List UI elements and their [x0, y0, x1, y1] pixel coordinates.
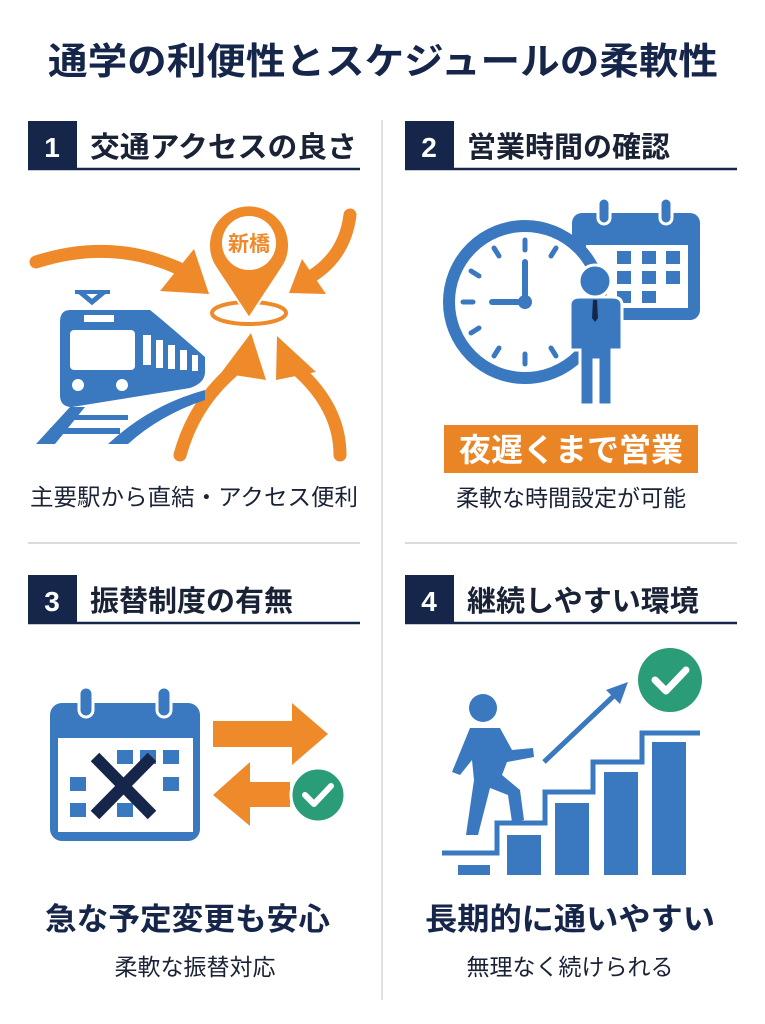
heading 4: 長期的に通いやすい	[425, 902, 715, 937]
caption 1: 主要駅から直結・アクセス便利	[30, 484, 358, 510]
icon: climbing person	[452, 694, 534, 835]
badge: late hours	[444, 425, 698, 473]
panel 3: transfer	[28, 575, 360, 980]
icon: map pin 新橋	[209, 205, 289, 324]
caption 3: 柔軟な振替対応	[114, 954, 276, 980]
header 3	[28, 575, 360, 623]
icon: businessman	[570, 265, 622, 405]
header 4: 継続しやすい環境	[467, 585, 699, 618]
header 2	[405, 121, 737, 169]
icon: growth arrow	[544, 682, 628, 762]
icon: green check	[638, 648, 702, 712]
icon: calendar	[572, 198, 700, 320]
heading 3: 急な予定変更も安心	[45, 902, 330, 937]
header 2: 営業時間の確認	[467, 131, 670, 164]
icon: train	[36, 292, 205, 444]
icon: clock	[449, 226, 601, 378]
header 1	[28, 121, 360, 169]
panel 1: access	[28, 121, 360, 510]
header 3: 3	[44, 586, 60, 617]
icon: map pin 新橋: 新橋	[228, 233, 270, 256]
icon: green check	[291, 768, 345, 822]
icon: stairs chart	[442, 733, 700, 875]
panel 2: hours	[405, 121, 737, 511]
caption 2: 柔軟な時間設定が可能	[456, 485, 686, 511]
icon: swap arrows	[213, 703, 328, 826]
header 4	[405, 575, 737, 623]
caption 4: 無理なく続けられる	[466, 954, 674, 980]
title: 通学の利便性とスケジュールの柔軟性	[48, 41, 718, 82]
panel 4: continuity	[405, 575, 737, 980]
badge: late hours: 夜遅くまで営業	[459, 432, 683, 468]
header 3: 振替制度の有無	[90, 585, 293, 618]
header 2: 2	[421, 132, 437, 163]
header 1: 交通アクセスの良さ	[90, 131, 357, 164]
icon: orange arrows	[36, 215, 350, 455]
header 1: 1	[44, 132, 60, 163]
header 4: 4	[421, 586, 437, 617]
icon: calendar with X	[50, 687, 200, 841]
